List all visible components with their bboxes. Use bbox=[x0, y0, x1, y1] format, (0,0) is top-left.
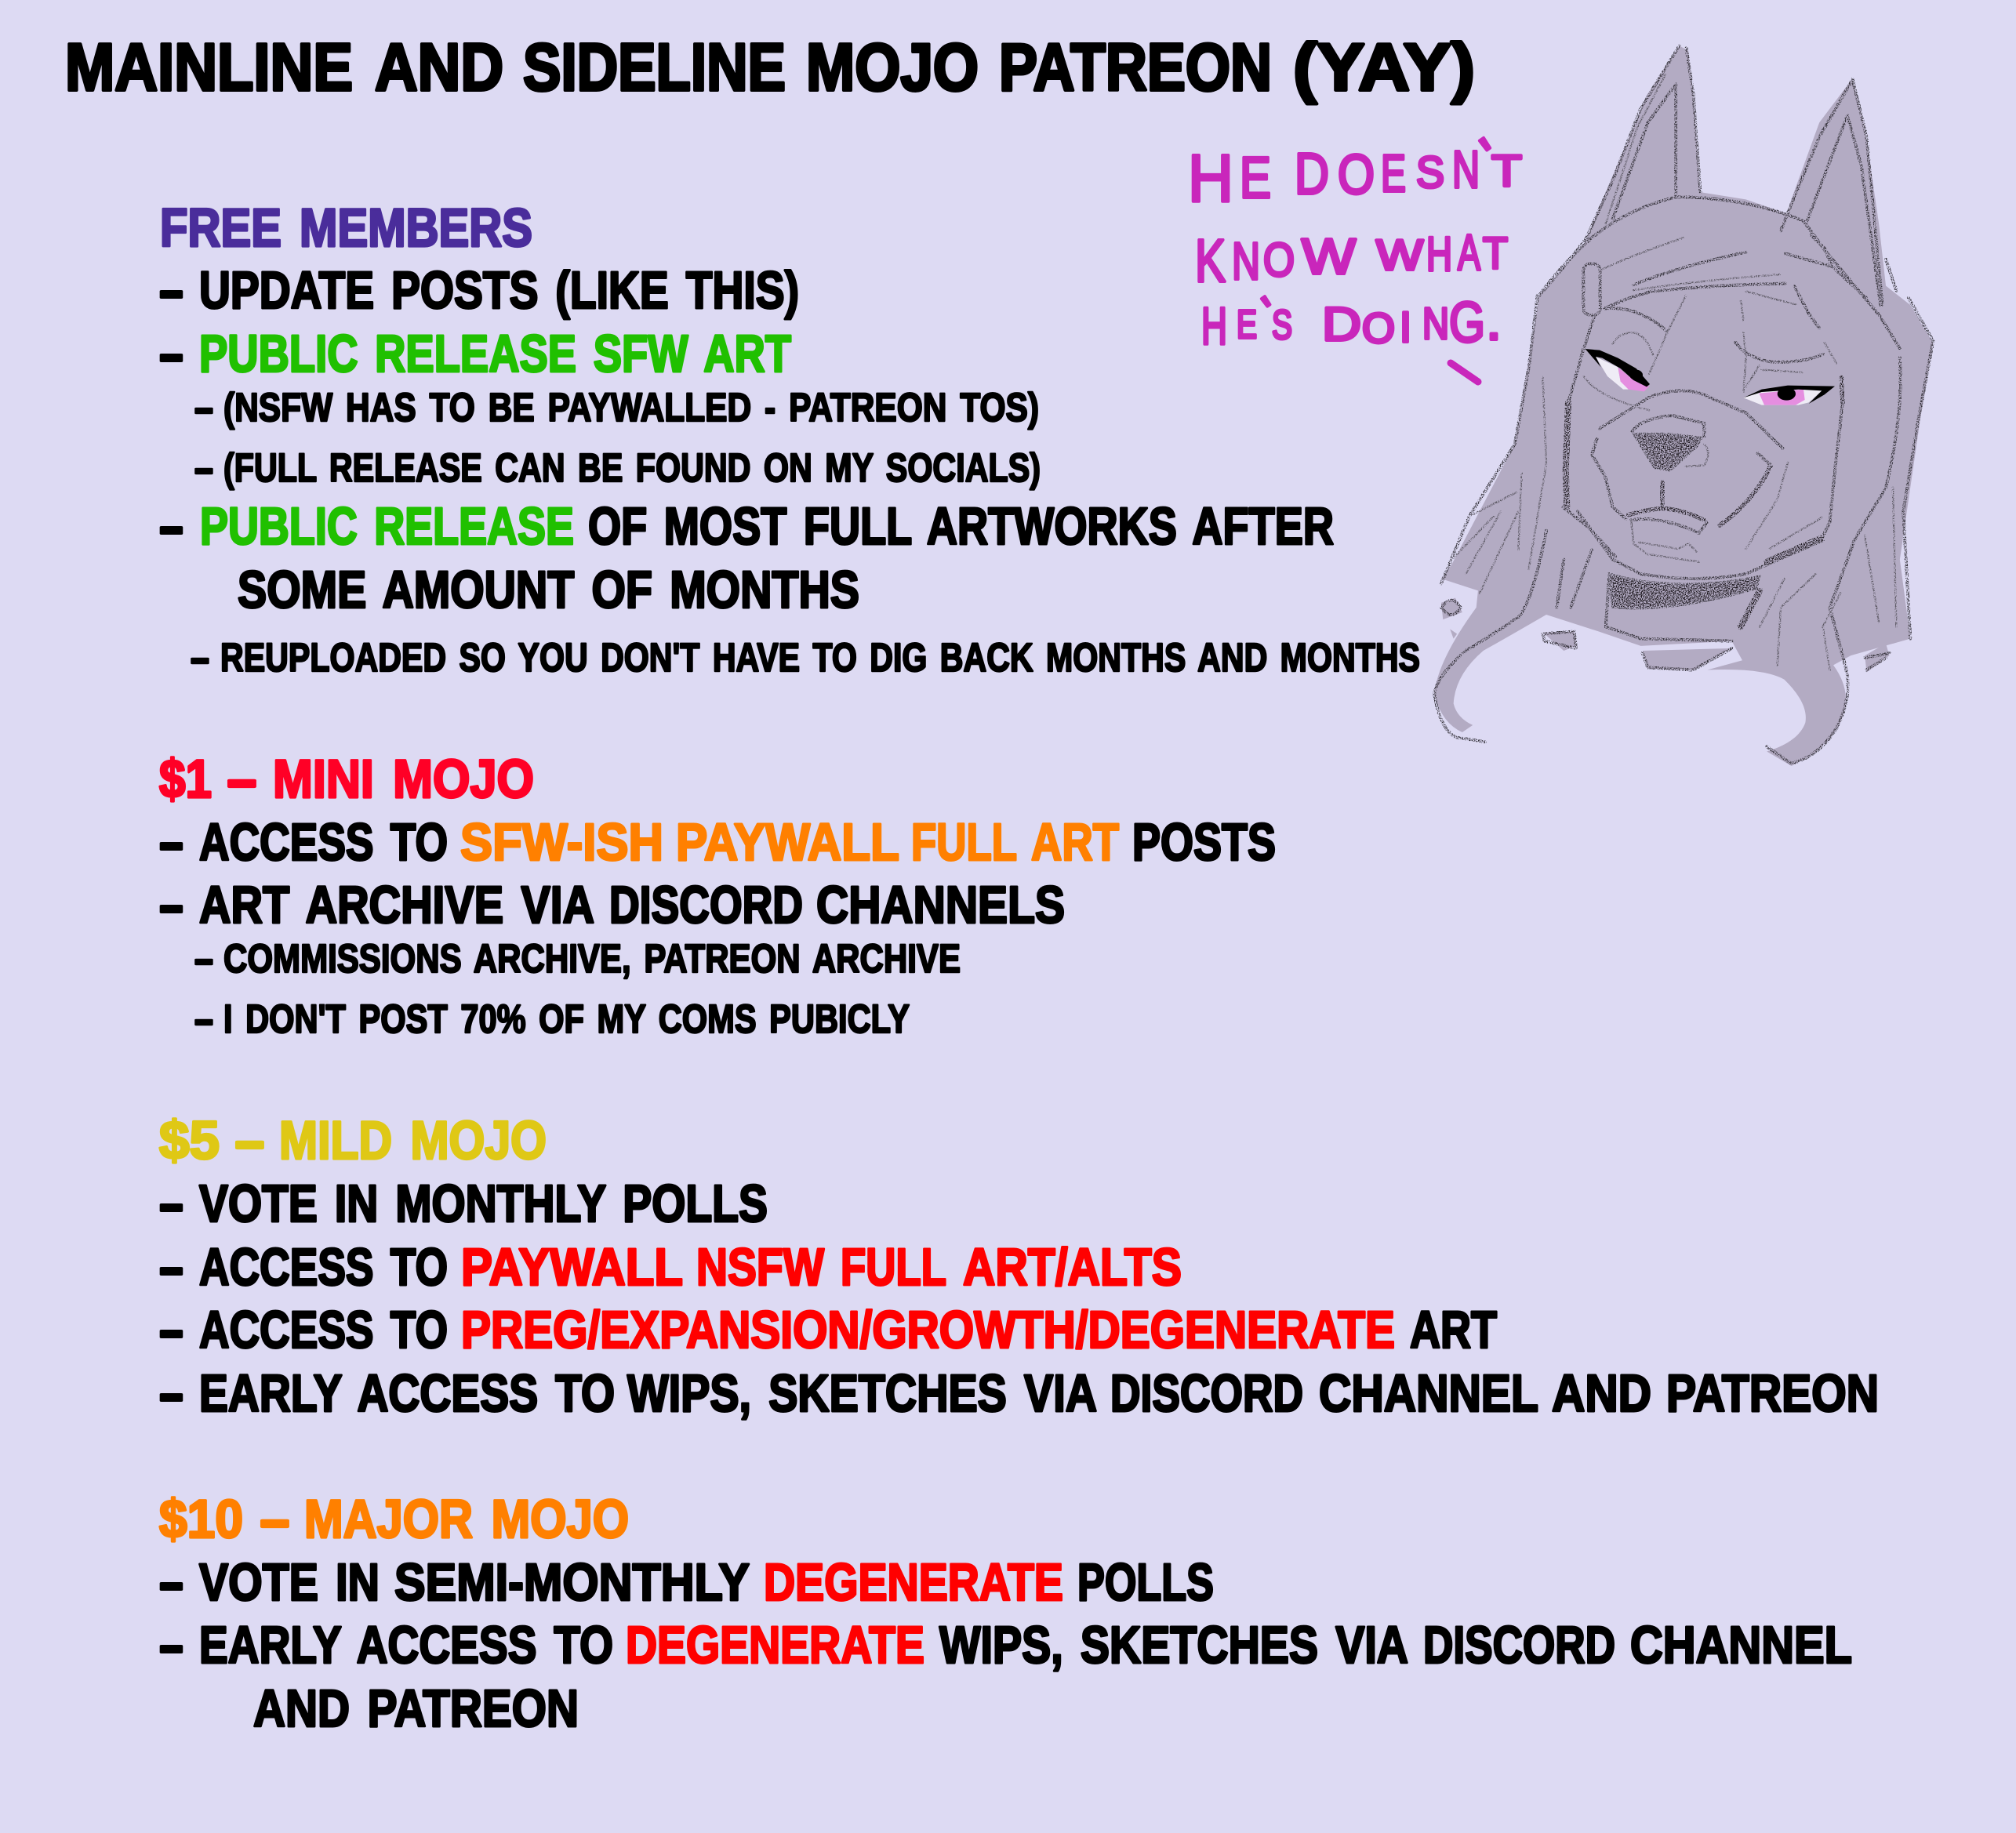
item: public release sfw art: - bbox=[158, 325, 184, 383]
item: public release sfw art: PUBLIC RELEASE SFW ART bbox=[199, 325, 791, 383]
eyes bbox=[1586, 349, 1835, 405]
line: he's doing.: S bbox=[1272, 303, 1292, 348]
item: nsfw paywall access: FULL bbox=[841, 1238, 946, 1297]
line: he doesn't: E bbox=[1240, 145, 1271, 210]
line: know what: W bbox=[1376, 230, 1423, 279]
item: semi-monthly polls: SEMI-MONTHLY bbox=[394, 1553, 750, 1612]
item: public release of full artworks: SOME AMOUNT OF MONTHS bbox=[238, 561, 859, 619]
item: degenerate wips early access: EARLY ACCESS TO bbox=[199, 1616, 613, 1675]
line: know what bbox=[1195, 224, 1508, 295]
item: semi-monthly polls bbox=[158, 1553, 1214, 1612]
title: (YAY) bbox=[1293, 31, 1475, 105]
heading: $10 major mojo: $10 bbox=[159, 1489, 243, 1549]
line: he doesn't: T bbox=[1491, 146, 1522, 196]
item: sfw-ish paywall access: ART bbox=[1031, 813, 1119, 872]
heading: $5 mild mojo: MILD MOJO bbox=[279, 1110, 547, 1171]
item: sfw-ish paywall access: POSTS bbox=[1132, 813, 1276, 872]
line: he doesn't: S bbox=[1416, 147, 1444, 198]
heading: $1 mini mojo: MINI MOJO bbox=[273, 749, 534, 809]
sub-item: commissions archive: - bbox=[194, 936, 214, 981]
item: public release of full artworks: PUBLIC RELEASE bbox=[200, 497, 574, 556]
heading: $1 mini mojo: - bbox=[226, 749, 258, 809]
sub-item: nsfw paywalled: (NSFW HAS TO BE PAYWALLED - PATREON TOS) bbox=[223, 385, 1039, 430]
item: early access wips: - bbox=[158, 1364, 184, 1423]
item: art archive: ART ARCHIVE VIA bbox=[199, 876, 594, 935]
item: early access wips: DISCORD bbox=[1110, 1364, 1303, 1423]
title: PATREON bbox=[999, 31, 1272, 105]
item: art archive: - bbox=[158, 876, 184, 935]
handwritten speech note bbox=[1188, 127, 1522, 382]
line: he's doing.: I bbox=[1400, 303, 1411, 351]
item: art archive: CHANNELS bbox=[816, 876, 1065, 935]
item: sfw-ish paywall access: FULL bbox=[911, 813, 1017, 872]
item: nsfw paywall access: NSFW bbox=[696, 1238, 825, 1297]
item: update posts: - bbox=[158, 261, 184, 320]
panel: $1 mini mojo tier bbox=[158, 749, 1276, 1041]
pencil linework: grainy strokes bbox=[1434, 45, 1933, 764]
line: he doesn't: N bbox=[1452, 140, 1480, 199]
line: know what: W bbox=[1302, 228, 1357, 285]
sub-item: full release on socials: (FULL RELEASE CAN BE FOUND ON MY SOCIALS) bbox=[223, 445, 1041, 490]
left eye bbox=[1586, 349, 1650, 391]
line: know what: N bbox=[1232, 232, 1260, 291]
item: early access wips bbox=[158, 1364, 1879, 1423]
title: SIDELINE bbox=[523, 31, 786, 105]
heading: $10 major mojo: MAJOR MOJO bbox=[304, 1489, 629, 1549]
heading: $1 mini mojo bbox=[159, 749, 534, 809]
line: he doesn't: H bbox=[1188, 142, 1233, 216]
item: public release of full artworks: OF MOST FULL ARTWORKS AFTER bbox=[588, 497, 1334, 556]
item: early access wips: PATREON bbox=[1666, 1364, 1879, 1423]
item: nsfw paywall access bbox=[158, 1238, 1182, 1297]
item: early access wips: EARLY ACCESS TO bbox=[199, 1364, 615, 1423]
item: public release of full artworks bbox=[158, 497, 1334, 619]
heading: $10 major mojo: - bbox=[259, 1489, 291, 1549]
item: degenerate wips early access bbox=[158, 1616, 1852, 1738]
heading: $5 mild mojo: - bbox=[234, 1110, 266, 1171]
line: he's doing.: O bbox=[1362, 305, 1395, 352]
title: MAINLINE bbox=[65, 31, 353, 105]
line: he's doing.: E bbox=[1237, 302, 1257, 347]
line: he doesn't: ' bbox=[1471, 127, 1514, 183]
item: early access wips: CHANNEL bbox=[1319, 1364, 1538, 1423]
item: degenerate art access: - bbox=[158, 1301, 184, 1359]
item: degenerate wips early access: DISCORD bbox=[1423, 1616, 1615, 1675]
item: nsfw paywall access: ACCESS TO bbox=[199, 1238, 448, 1297]
line: he doesn't: O bbox=[1338, 144, 1375, 206]
item: nsfw paywall access: - bbox=[158, 1238, 184, 1297]
sub-item: 70 percent of coms: - bbox=[194, 996, 214, 1041]
sub-item: reuploaded: - bbox=[190, 635, 210, 680]
item: early access wips: WIPS, SKETCHES VIA bbox=[627, 1364, 1097, 1423]
item: monthly polls: VOTE IN MONTHLY POLLS bbox=[199, 1174, 768, 1233]
line: know what: K bbox=[1195, 227, 1226, 295]
item: monthly polls: - bbox=[158, 1174, 184, 1233]
item: degenerate wips early access: DEGENERATE bbox=[626, 1616, 924, 1675]
title: AND bbox=[375, 31, 503, 105]
item: degenerate wips early access: CHANNEL bbox=[1630, 1616, 1852, 1675]
sub-item: commissions archive: COMMISSIONS ARCHIVE, PATREON ARCHIVE bbox=[223, 936, 961, 981]
right eye bbox=[1743, 386, 1835, 405]
item: early access wips: AND bbox=[1552, 1364, 1651, 1423]
line: he's doing.: G bbox=[1449, 292, 1485, 354]
heading: free members: FREE MEMBERS bbox=[160, 198, 532, 258]
flat grey silhouette bbox=[1434, 45, 1933, 766]
sub-item: 70 percent of coms: I DON'T POST 70% OF MY COMS PUBICLY bbox=[223, 996, 910, 1041]
line: he's doing.: . bbox=[1486, 290, 1502, 351]
item: nsfw paywall access: PAYWALL bbox=[461, 1238, 683, 1297]
item: public release of full artworks: - bbox=[158, 497, 184, 556]
item: nsfw paywall access: ART/ALTS bbox=[963, 1238, 1182, 1297]
panel: free members tier bbox=[158, 198, 1420, 680]
sub-item: reuploaded: REUPLOADED SO YOU DON'T HAVE TO DIG BACK MONTHS AND MONTHS bbox=[220, 635, 1420, 680]
item: sfw-ish paywall access: - bbox=[158, 813, 184, 872]
heading: $1 mini mojo: $1 bbox=[159, 749, 212, 809]
line: he doesn't bbox=[1188, 127, 1522, 216]
line: he's doing.: N bbox=[1422, 299, 1449, 349]
item: degenerate art access: ACCESS TO bbox=[199, 1301, 448, 1359]
title: MOJO bbox=[806, 31, 979, 105]
item: degenerate art access: ART bbox=[1410, 1301, 1497, 1359]
line: know what: A bbox=[1458, 224, 1480, 281]
item: degenerate wips early access: - bbox=[158, 1616, 184, 1675]
item: degenerate art access: PREG/EXPANSION/GROWTH/DEGENERATE bbox=[461, 1301, 1395, 1359]
face linework bbox=[1537, 235, 1866, 562]
item: semi-monthly polls: VOTE IN bbox=[199, 1553, 380, 1612]
line: he doesn't: E bbox=[1381, 144, 1406, 203]
line: know what: O bbox=[1263, 234, 1295, 286]
item: sfw-ish paywall access: ACCESS TO bbox=[199, 813, 448, 872]
line: know what: T bbox=[1483, 228, 1508, 278]
item: sfw-ish paywall access: SFW-ISH bbox=[460, 813, 663, 872]
item: sfw-ish paywall access: PAYWALL bbox=[676, 813, 899, 872]
item: sfw-ish paywall access bbox=[158, 813, 1276, 872]
item: art archive bbox=[158, 876, 1065, 935]
panel: $10 major mojo tier bbox=[158, 1489, 1852, 1738]
line: he's doing. bbox=[1201, 287, 1502, 356]
item: semi-monthly polls: - bbox=[158, 1553, 184, 1612]
heading: $5 mild mojo: $5 bbox=[159, 1110, 220, 1171]
item: degenerate wips early access: WIPS, SKETCHES VIA bbox=[939, 1616, 1408, 1675]
title bbox=[65, 31, 1475, 105]
item: update posts: UPDATE POSTS (LIKE THIS) bbox=[199, 261, 799, 320]
heading: $5 mild mojo bbox=[159, 1110, 547, 1171]
item: degenerate wips early access: AND PATREON bbox=[253, 1679, 579, 1738]
panel: $5 mild mojo tier bbox=[158, 1110, 1879, 1423]
line: he's doing.: H bbox=[1201, 297, 1227, 356]
line: he doesn't: D bbox=[1295, 141, 1329, 206]
item: art archive: DISCORD bbox=[609, 876, 803, 935]
item: semi-monthly polls: DEGENERATE bbox=[764, 1553, 1063, 1612]
illustration: wolf head in hood bbox=[1434, 45, 1933, 766]
sub-item: full release on socials: - bbox=[194, 445, 214, 490]
line: he's doing.: ' bbox=[1254, 287, 1289, 332]
item: semi-monthly polls: POLLS bbox=[1077, 1553, 1214, 1612]
heading: $10 major mojo bbox=[159, 1489, 629, 1549]
sub-item: nsfw paywalled: - bbox=[194, 385, 214, 430]
speech tick mark bbox=[1451, 363, 1478, 382]
line: he's doing.: D bbox=[1322, 298, 1361, 350]
line: know what: H bbox=[1426, 227, 1452, 281]
